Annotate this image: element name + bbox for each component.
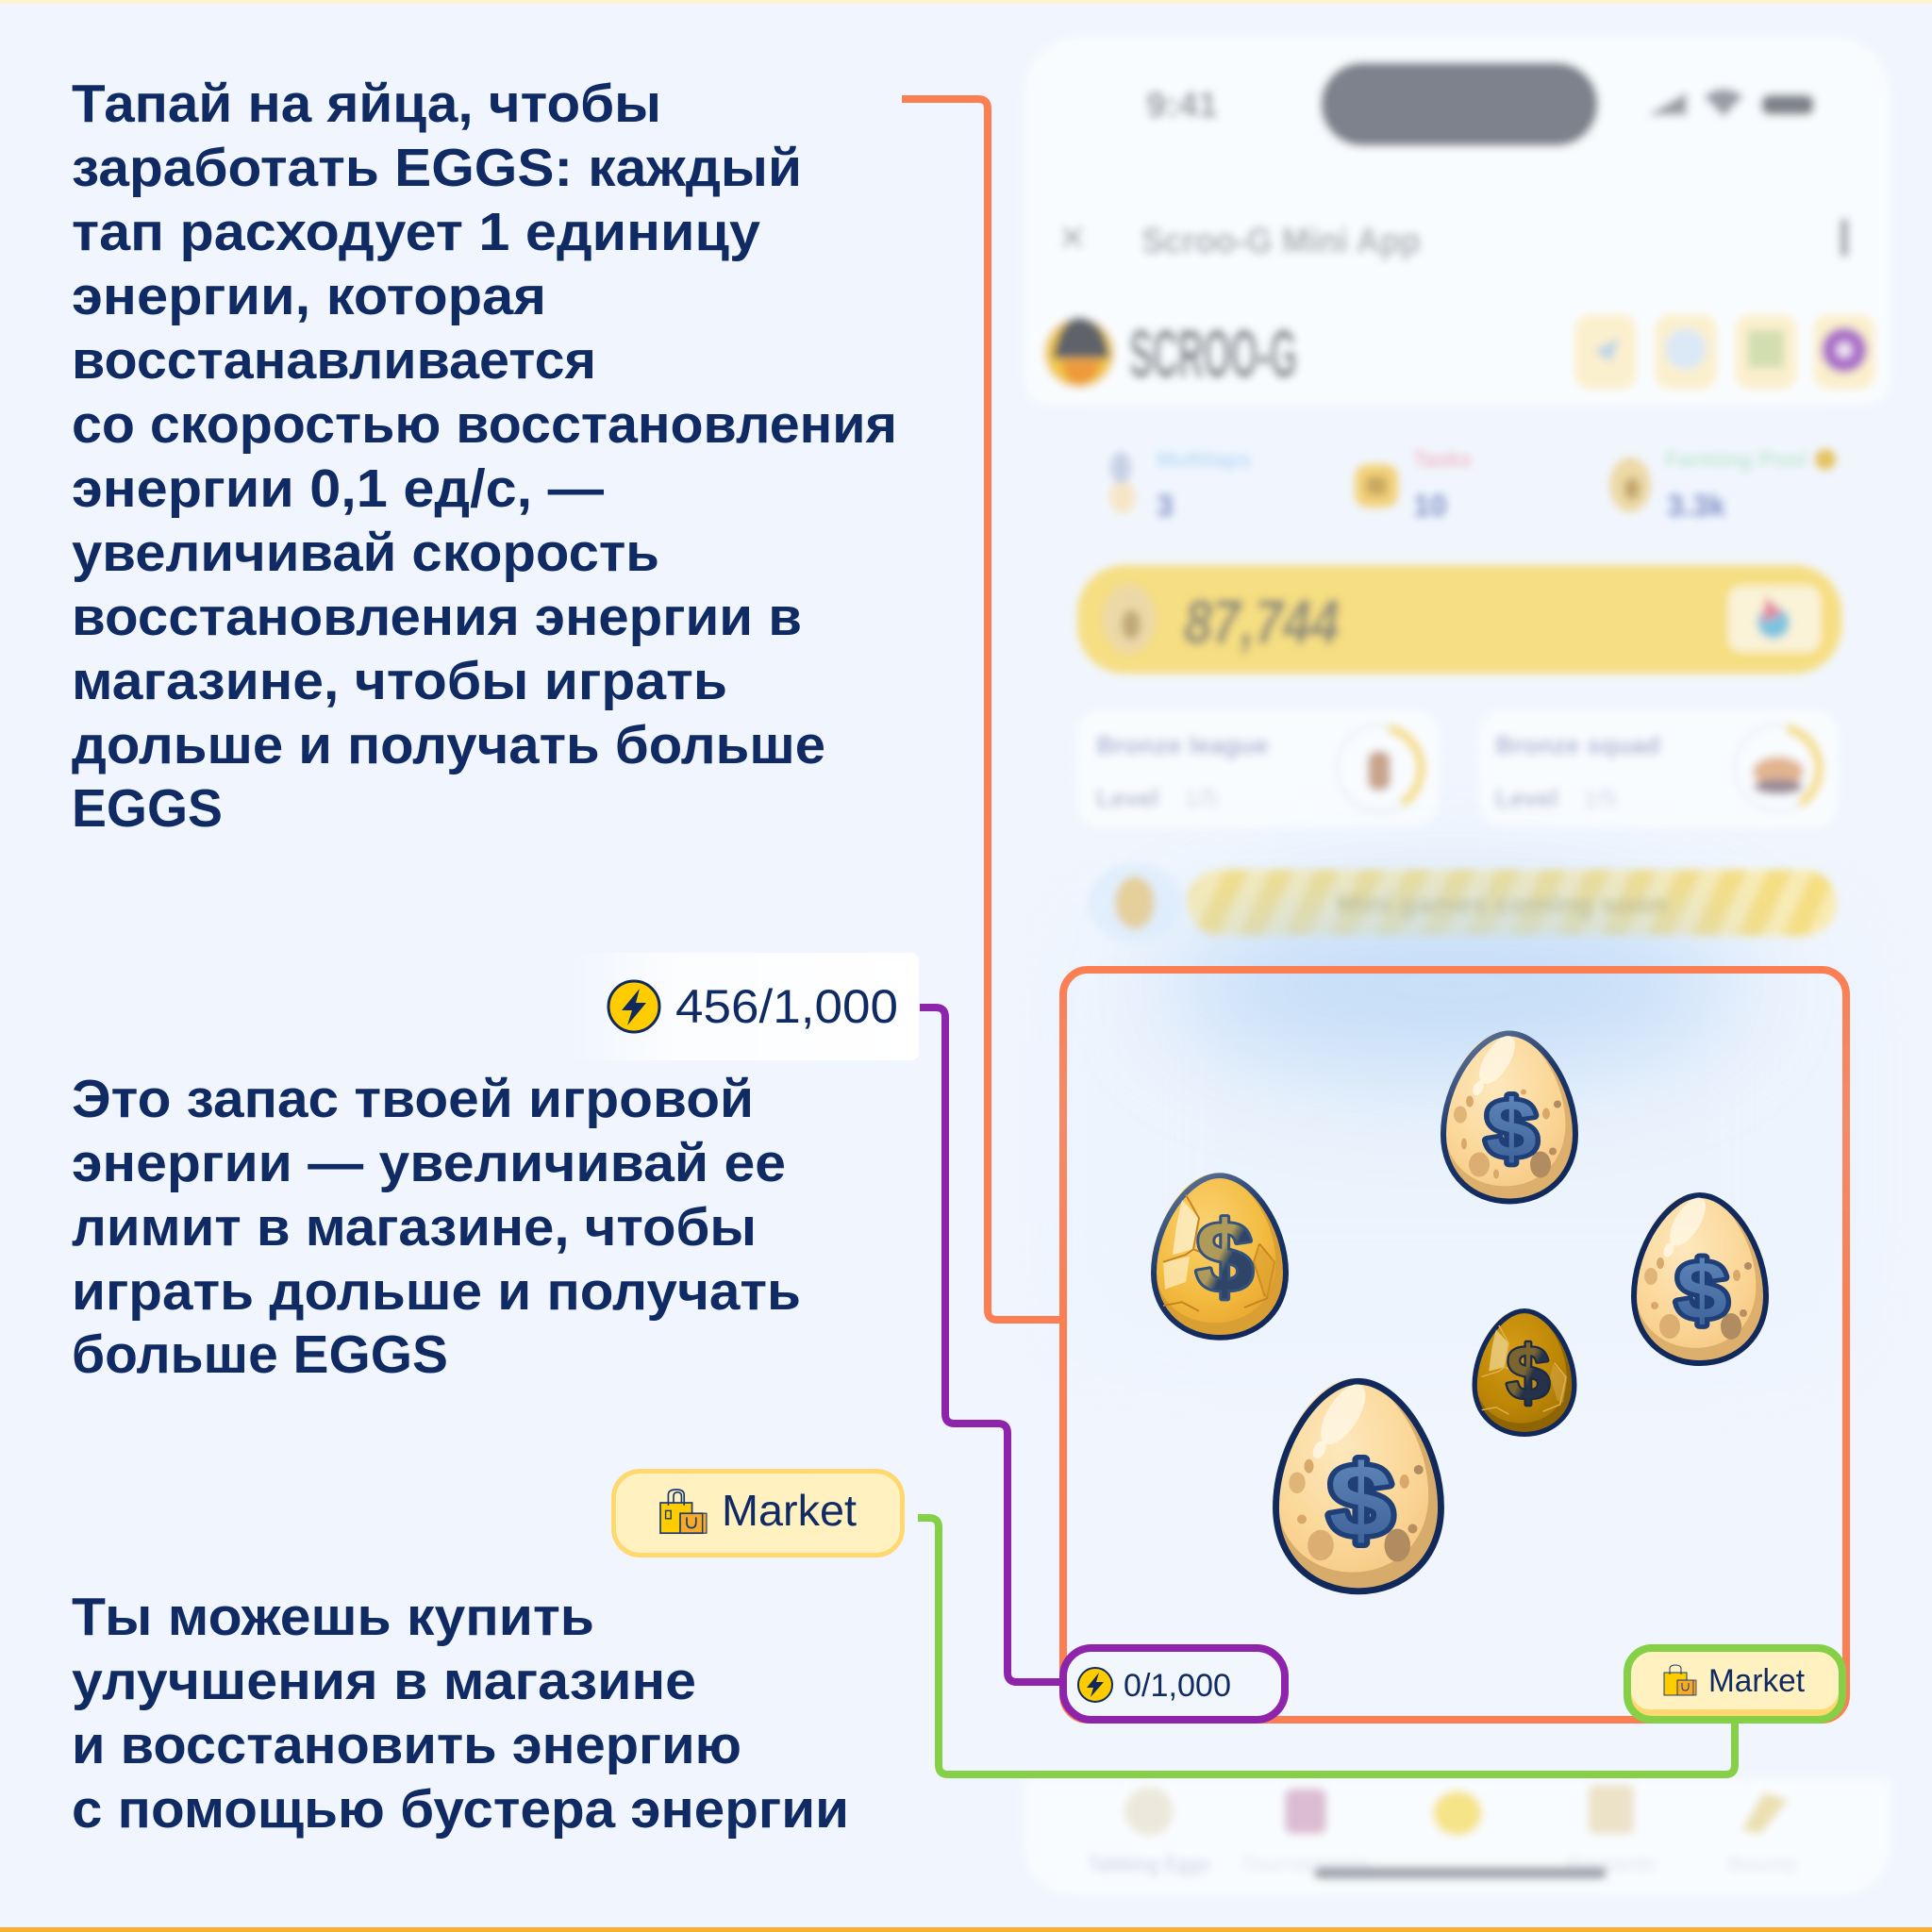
callout: market button: [613, 1472, 902, 1555]
blurred phone screen: Farming Pool: [1665, 447, 1807, 473]
blurred phone screen: Bronze league: [1096, 731, 1269, 759]
text block: energy reserve: играть дольше и получать: [72, 1261, 801, 1322]
text block: energy reserve: [72, 1069, 801, 1385]
text block: market upgrades: улучшения в магазине: [72, 1651, 696, 1711]
blurred phone screen: SCROO-G: [1129, 317, 1297, 392]
panel: energy pill highlighted in purple: [1063, 1648, 1285, 1720]
panel: market button highlighted in green: Market: [1708, 1663, 1806, 1699]
blurred phone screen: [1024, 37, 1890, 1894]
egg: large bottom: $: [1329, 1443, 1392, 1557]
text block: energy reserve: энергии — увеличивай ее: [72, 1133, 786, 1193]
egg: cracked gold: $: [1195, 1200, 1254, 1312]
text block: market upgrades: Ты можешь купить: [72, 1587, 594, 1647]
glow behind eggs: [1170, 896, 1736, 1075]
text block: energy reserve: больше EGGS: [72, 1324, 448, 1385]
blurred phone screen: Level: [1096, 784, 1158, 812]
blurred phone screen: Tasks: [1413, 447, 1472, 473]
text block: tapping eggs: тап расходует 1 единицу: [72, 202, 760, 262]
egg: small dark: $: [1507, 1331, 1550, 1416]
icon: shopping bags: [660, 1490, 707, 1533]
text block: tapping eggs: заработать EGGS: каждый: [72, 138, 802, 198]
blurred phone screen: Level: [1495, 784, 1558, 812]
text block: tapping eggs: Тапай на яйца, чтобы: [72, 74, 661, 134]
egg: top: $: [1486, 1084, 1537, 1174]
blurred phone screen: 1/5: [1184, 784, 1218, 812]
egg: small dark: [1474, 1309, 1574, 1434]
text block: energy reserve: Это запас твоей игровой: [72, 1069, 754, 1129]
blurred phone screen: 87,744: [1184, 587, 1340, 657]
blurred phone screen: Scroo-G Mini App: [1141, 222, 1421, 261]
blurred phone screen: Tabbing Eggs: [1088, 1852, 1210, 1877]
text block: tapping eggs: со скоростью восстановления: [72, 394, 897, 455]
egg: cracked gold: [1154, 1174, 1286, 1338]
text block: tapping eggs: восстановления энергии в: [72, 587, 802, 647]
blurred phone screen: 3: [1157, 489, 1174, 523]
callout: energy counter chip: [570, 953, 919, 1060]
text block: tapping eggs: дольше и получать больше: [72, 715, 825, 775]
egg: top: [1443, 1030, 1575, 1202]
blurred phone screen: Bronze squad: [1495, 731, 1660, 759]
icon: small lightning: [1078, 1668, 1112, 1702]
text block: tapping eggs: энергии, которая: [72, 266, 546, 326]
egg: large bottom: [1275, 1377, 1441, 1591]
top strip: [0, 0, 1932, 4]
text block: energy reserve: лимит в магазине, чтобы: [72, 1197, 757, 1257]
panel: game area outline: [1063, 970, 1846, 1720]
blurred phone screen: Mini games coming soon: [1337, 890, 1667, 919]
text block: market upgrades: [72, 1587, 849, 1840]
text block: tapping eggs: [72, 74, 897, 839]
panel: market button highlighted in green: [1627, 1648, 1842, 1720]
blurred phone screen: 9:41: [1146, 86, 1218, 125]
text block: tapping eggs: энергии 0,1 ед/с, —: [72, 458, 604, 519]
text block: tapping eggs: увеличивай скорость: [72, 523, 659, 583]
blurred phone screen: Multitaps: [1157, 447, 1251, 473]
icon: small shopping bags: [1664, 1665, 1696, 1695]
arrow: green connector: [918, 1518, 1735, 1774]
blurred phone screen: ×: [1058, 210, 1086, 263]
icon: lightning: [608, 981, 659, 1032]
blurred phone screen: 1/5: [1583, 784, 1617, 812]
text block: market upgrades: и восстановить энергию: [72, 1715, 741, 1775]
text block: market upgrades: с помощью бустера энергии: [72, 1779, 849, 1840]
callout: market button: Market: [722, 1486, 857, 1535]
arrow: purple connector: [920, 1008, 1064, 1682]
arrow: orange connector: [902, 99, 1064, 1320]
callout: energy counter chip: 456/1,000: [675, 980, 898, 1033]
blurred phone screen: 10: [1413, 489, 1447, 523]
blurred phone screen: Tournaments: [1241, 1852, 1371, 1877]
egg: right: $: [1676, 1245, 1727, 1336]
text block: tapping eggs: EGGS: [72, 778, 223, 839]
blurred phone screen: Rewards: [1567, 1852, 1656, 1877]
blurred phone screen: Bounty: [1728, 1852, 1798, 1877]
egg: right: [1634, 1192, 1766, 1363]
blurred phone screen: 3.3k: [1667, 489, 1725, 523]
text block: tapping eggs: восстанавливается: [72, 330, 596, 391]
panel: energy pill highlighted in purple: 0/1,000: [1124, 1668, 1231, 1704]
bottom strip: [0, 1927, 1932, 1932]
text block: tapping eggs: магазине, чтобы играть: [72, 651, 727, 711]
